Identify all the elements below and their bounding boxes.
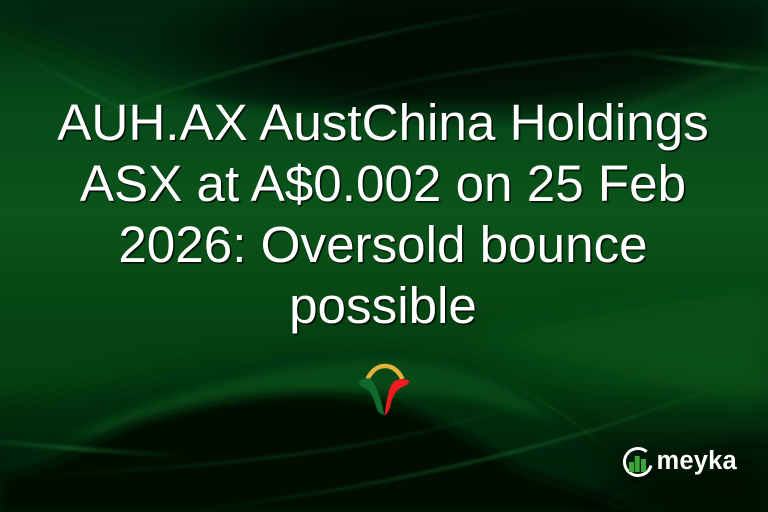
right mid green band <box>470 290 768 400</box>
top dark wedge <box>0 0 768 92</box>
title: AUH.AX AustChina Holdings ASX at A$0.002 on 25 Feb 2026: Oversold bounce possible <box>57 94 709 334</box>
lighter sliver <box>60 360 560 440</box>
icon: center arch mark <box>358 364 410 416</box>
lower outer dark hill <box>0 352 660 512</box>
wordmark: meyka <box>656 447 737 475</box>
lower dark hill <box>0 394 640 512</box>
icon: meyka chart circle <box>622 447 652 477</box>
upper swoosh highlights <box>20 2 560 145</box>
logo: meyka <box>622 447 737 477</box>
lower swoosh highlights <box>0 438 190 456</box>
